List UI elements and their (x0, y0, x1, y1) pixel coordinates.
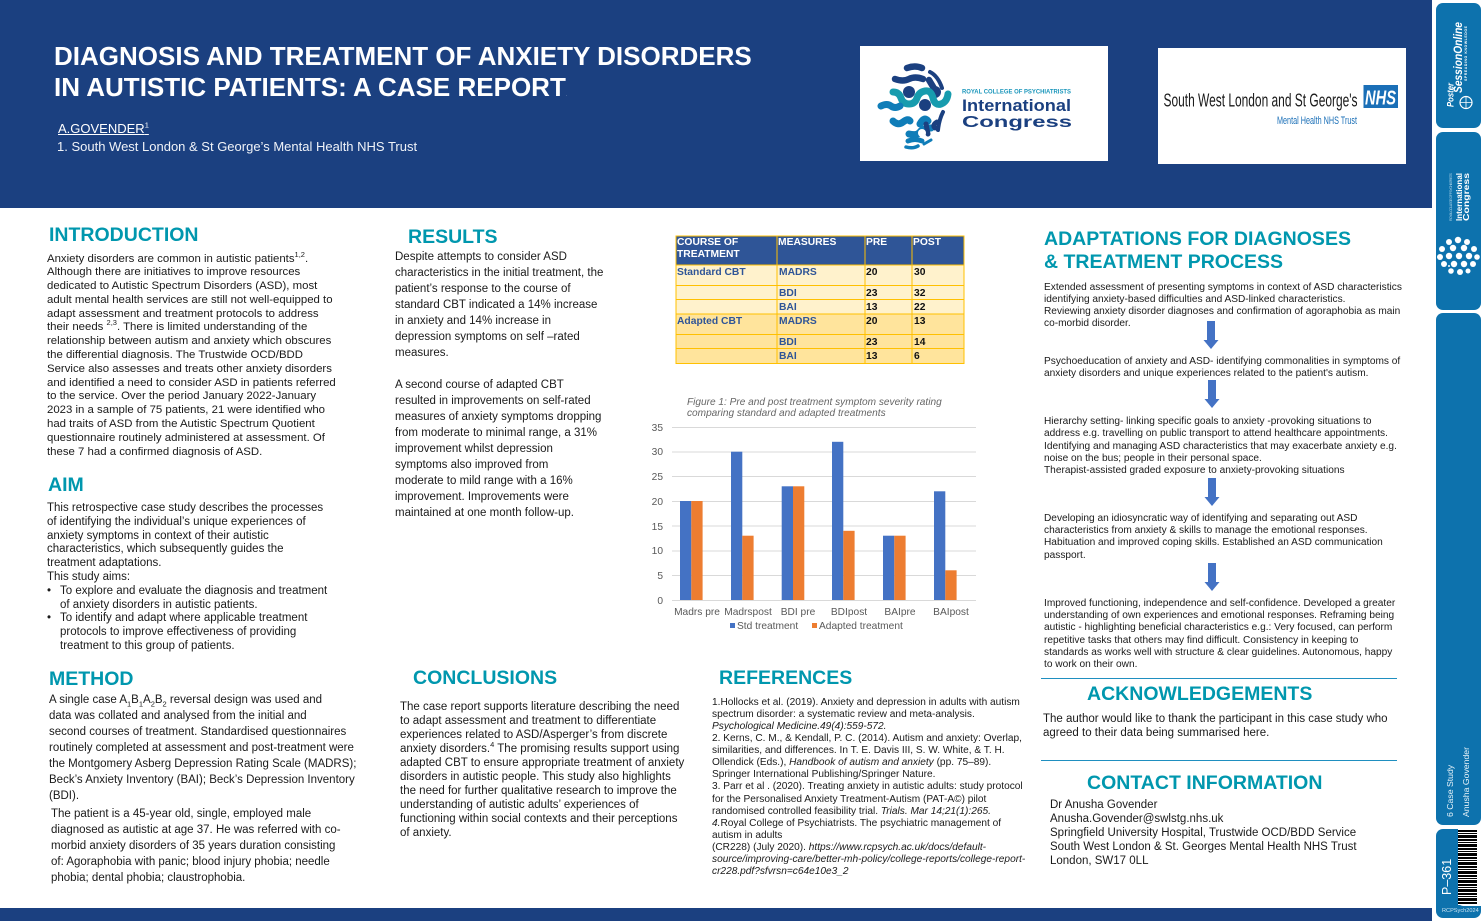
text: step 4: characteristics from anxiety & skills to manage the emotional responses. (1044, 525, 1368, 536)
text: aim: This study aims: (47, 571, 130, 583)
bar chart: 25 (652, 472, 663, 483)
table: pre and post scores: MEASURES (778, 237, 836, 248)
tab: case study (1436, 313, 1481, 825)
table: pre and post scores (676, 236, 964, 364)
text: introduction: the differential diagnosis. The Trustwide OCD/BDD (47, 349, 303, 361)
text: introduction: questionnaire routinely administered at assessment. Of (47, 432, 325, 444)
table: pre and post scores: PRE (866, 237, 887, 248)
table: pre and post scores: 6 (914, 351, 920, 362)
text: step 1: Reviewing anxiety disorder diagnoses and confirmation of agoraphobia as main (1044, 306, 1400, 317)
tab: Poster Session Online (1436, 3, 1481, 128)
text: aim: protocols to improve effectiveness of providing (60, 626, 296, 638)
bar chart: BDIpost (831, 607, 867, 618)
title: IN AUTISTIC PATIENTS: A CASE REPORT. (54, 72, 567, 102)
logo: NHS trust: NHS (1365, 88, 1396, 110)
tab: International Congress: ROYAL COLLEGE OF PSYCHIATRISTS (1449, 172, 1453, 221)
text: acknowledgements (1043, 713, 1388, 739)
text: results (395, 251, 603, 519)
tab: poster number and barcode (1436, 829, 1481, 918)
text: introduction: had traits of ASD from the Autistic Spectrum Quotient (47, 418, 315, 430)
arrow: step 1 to 2 (1204, 321, 1218, 349)
text: conclusions: disorders in autistic people. This study also highlights (400, 771, 671, 783)
text: introduction: these 7 had a confirmed diagnosis of ASD. (47, 446, 262, 458)
text: results: improvement. Improvements were (395, 491, 569, 503)
text: step 4: Developing an idiosyncratic way of identifying and separating out ASD (1044, 513, 1358, 524)
text: aim: characteristics, which subsequently guides the (47, 543, 284, 555)
author: A.GOVENDER1 (58, 121, 149, 136)
text: results: patient’s response to the course of (395, 283, 571, 295)
text: results: characteristics in the initial treatment, the (395, 267, 603, 279)
text: step 4: passport. (1044, 550, 1086, 561)
text: patient description: of: Agoraphobia with panic; blood injury phobia; needle (51, 856, 330, 868)
text: conclusions: adapted CBT to ensure appropriate treatment of anxiety (400, 757, 684, 769)
panel: introduction (47, 224, 336, 458)
text: step 5: Improved functioning, independence and self-confidence. Developed a greater (1044, 598, 1395, 609)
text: patient description: The patient is a 45-year old, single, employed male (51, 808, 311, 820)
panel: acknowledgements (1043, 682, 1388, 739)
logo: RCPsych International Congress (860, 46, 1108, 161)
text: method design: A single case A1B1A2B2 reversal design was used and (49, 694, 322, 708)
text: references: 4.Royal College of Psychiatrists. The psychiatric management of (712, 818, 1001, 829)
heading: acknowledgements: ACKNOWLEDGEMENTS (1087, 682, 1312, 704)
bar chart: 0 (657, 596, 663, 607)
text: results: Despite attempts to consider ASD (395, 251, 567, 263)
text: conclusions: of anxiety. (400, 827, 452, 839)
text: step 1: Extended assessment of presenting symptoms in context of ASD characteristics (1044, 282, 1402, 293)
poster number: P‒361 (1440, 859, 1454, 895)
table: pre and post scores: 13 (866, 351, 878, 362)
text: introduction: 2023 in a sample of 75 patients, 21 were identified who (47, 404, 325, 416)
tab: International Congress (1436, 132, 1481, 310)
text: step 3 (1044, 416, 1397, 476)
text: references: source/improving-care/better-mh-policy/college-reports/college-report- (712, 854, 1025, 865)
text: results: resulted in improvements on self-rated (395, 395, 591, 407)
text: aim: treatment to this group of patients. (60, 640, 235, 652)
text: aim: • (47, 585, 51, 597)
text: step 2: anxiety disorders and unique experiences related to the patient's autism. (1044, 368, 1368, 379)
tab: case study: 6 Case Study (1445, 765, 1455, 817)
text: method design: second courses of treatment. Standardised questionnaires (49, 726, 346, 738)
text: conclusions: experiences related to ASD/Asperger’s from discrete (400, 729, 667, 741)
panel: side rail (1436, 3, 1481, 918)
figure caption: comparing standard and adapted treatments (687, 408, 886, 419)
text: results: depression symptoms on self –rated (395, 331, 580, 343)
text: references: randomised controlled feasibility trial. Trials. Mar 14;21(1):265. (712, 806, 991, 817)
arrow: step 4 to 5 (1204, 563, 1220, 591)
panel: adaptations (1044, 228, 1402, 670)
heading: results: RESULTS (408, 226, 498, 248)
text: patient description: morbid anxiety disorders of 35 years duration consisting (51, 840, 335, 852)
panel: contact information (1050, 772, 1357, 867)
tab: Poster Session Online: Poster (1446, 82, 1456, 107)
bar chart: BAIpost (933, 607, 969, 618)
text: introduction: dedicated to Autistic Spectrum Disorders (ASD), most (47, 280, 317, 292)
table: pre and post scores: TREATMENT (677, 249, 740, 260)
text: references: spectrum disorder: a systematic review and meta-analysis. (712, 709, 975, 720)
bar chart: 20 (652, 497, 663, 508)
table: pre and post scores: BAI (779, 302, 797, 313)
text: references: Ollendick (Eds.), Handbook of autism and anxiety (pp. 75–89). (712, 757, 991, 768)
text: introduction: Although there are initiatives to improve resources (47, 266, 300, 278)
table: pre and post scores: BDI (779, 337, 797, 348)
text: references: cr228.pdf?sfvrsn=c64e10e3_2 (712, 866, 849, 877)
text: step 3: Therapist-assisted graded exposure to anxiety-provoking situations (1044, 465, 1345, 476)
text: aim: To explore and evaluate the diagnosis and treatment (60, 585, 327, 597)
text: step 2 (1044, 356, 1400, 379)
tab: Poster Session Online: SessionOnline (1451, 22, 1465, 93)
text: aim: treatment adaptations. (47, 557, 161, 569)
table: pre and post scores: Standard CBT (677, 267, 746, 278)
text: method design: Beck’s Anxiety Inventory (BAI); Beck’s Depression Inventory (49, 774, 355, 786)
text: introduction: Service also assesses and treats other anxiety disorders (47, 363, 332, 375)
text: introduction (47, 250, 336, 458)
heading: adaptations: & TREATMENT PROCESS (1044, 250, 1283, 272)
text: conclusions: anxiety disorders.4 The promising results support using (400, 740, 679, 755)
table: pre and post scores: 20 (866, 316, 878, 327)
table: pre and post scores: MADRS (779, 267, 817, 278)
table: pre and post scores: 13 (866, 302, 878, 313)
text: conclusions: to adapt assessment and treatment to differentiate (400, 715, 656, 727)
text: step 3: Hierarchy setting- linking specific goals to anxiety -provoking situations to (1044, 416, 1372, 427)
text: step 3: noise on the bus; people in their personal space. (1044, 453, 1262, 464)
text: references (712, 697, 1025, 877)
heading: adaptations (1044, 228, 1351, 272)
text: introduction: adult mental health services are still not well-equipped to (47, 294, 333, 306)
conference tag: RCPSych2024 (1442, 908, 1479, 914)
affiliation: 1. South West London & St George’s Mental Health NHS Trust (57, 139, 417, 154)
text: results: from moderate to minimal range, a 31% (395, 427, 597, 439)
footer band (0, 908, 1432, 921)
tab: case study: Anusha Govender (1461, 747, 1471, 817)
text: method design: data was collated and analysed from the initial and (49, 710, 307, 722)
text: conclusions: the need for further qualitative research to improve the (400, 785, 677, 797)
tab: Poster Session Online: SPREADING KNOWLEDGE (1464, 25, 1468, 81)
table: pre and post scores: 14 (914, 337, 926, 348)
bar chart: Adapted treatment (819, 621, 903, 632)
panel: method (49, 668, 356, 884)
text: results: measures of anxiety symptoms dropping (395, 411, 601, 423)
text: step 4: Habituation and improved coping skills. Established an ASD communication (1044, 537, 1383, 548)
bar chart: 15 (652, 522, 663, 533)
text: conclusions: The case report supports literature describing the need (400, 701, 679, 713)
text: step 1 (1044, 282, 1402, 329)
panel: aim (47, 474, 328, 652)
figure caption (687, 397, 942, 419)
text: step 1: co-morbid disorder. (1044, 318, 1131, 329)
bar chart (652, 423, 976, 632)
text: references: (CR228) (July 2020). https://www.rcpsych.ac.uk/docs/default- (712, 842, 986, 853)
arrow: step 2 to 3 (1204, 380, 1220, 408)
text: step 5: autistic - highlighting beneficial characteristics e.g.: Very focused, can perform (1044, 622, 1392, 633)
bar chart: 5 (657, 571, 663, 582)
heading: contact information: CONTACT INFORMATION (1087, 772, 1322, 794)
text: step 5: to work on their own. (1044, 659, 1137, 670)
text: introduction: relationship between autism and anxiety which obscures (47, 335, 331, 347)
bar chart: Madrs pre (674, 607, 720, 618)
text: introduction: adapt assessment and treatment protocols to address (47, 308, 319, 320)
text: step 4 (1044, 513, 1383, 561)
text: method design (49, 694, 356, 802)
text: contact details (1050, 799, 1357, 867)
text: aim: of identifying the individual’s unique experiences of (47, 516, 306, 528)
text: results: A second course of adapted CBT (395, 379, 564, 391)
table: pre and post scores: MADRS (779, 316, 817, 327)
text: results: maintained at one month follow-up. (395, 507, 574, 519)
text: references: 1.Hollocks et al. (2019). Anxiety and depression in adults with autism (712, 697, 1020, 708)
text: contact details: London, SW17 0LL (1050, 855, 1148, 867)
header band (0, 0, 1432, 208)
text: references: for the Personalised Anxiety Treatment-Autism (PAT-A©) pilot (712, 794, 986, 804)
text: introduction: Anxiety disorders are common in autistic patients1,2. (47, 250, 308, 264)
tab: International Congress: International (1455, 173, 1464, 221)
text: results: in anxiety and 14% increase in (395, 315, 551, 327)
heading: conclusions: CONCLUSIONS (413, 666, 557, 688)
text: introduction: their needs 2,3. There is limited understanding of the (47, 319, 307, 333)
table: pre and post scores: 22 (914, 302, 926, 313)
heading: introduction: INTRODUCTION (49, 224, 198, 246)
text: results: moderate to mild range with a 16% (395, 475, 573, 487)
text: method design: routinely completed at assessment and post-treatment were (49, 742, 354, 754)
text: step 5: understanding of own experiences and emotional responses. Reframing being (1044, 610, 1394, 621)
text: step 3: address e.g. travelling on public transport to attend healthcare appointments. (1044, 428, 1388, 439)
text: step 5 (1044, 598, 1396, 670)
text: references: Springer International Publishing/Springer Nature. (712, 769, 935, 780)
logo: NHS trust: Mental Health NHS Trust (1277, 115, 1357, 127)
text: results: symptoms also improved from (395, 459, 548, 471)
text: aim: • (47, 612, 51, 624)
title: DIAGNOSIS AND TREATMENT OF ANXIETY DISORDERS (54, 41, 752, 71)
heading: adaptations: ADAPTATIONS FOR DIAGNOSES (1044, 228, 1351, 250)
text: introduction: to the service. Over the period January 2022-January (47, 390, 316, 402)
heading: aim: AIM (48, 474, 84, 496)
heading: method: METHOD (49, 668, 134, 690)
title (54, 41, 752, 102)
table: pre and post scores: BDI (779, 288, 797, 299)
text: contact details: Anusha.Govender@swlstg.nhs.uk (1050, 813, 1223, 825)
logo: RCPsych International Congress: ROYAL COLLEGE OF PSYCHIATRISTS (962, 88, 1072, 96)
barcode (1458, 829, 1481, 906)
text: step 5: standards as works well with structure & clear guidelines. Autonomous, happy (1044, 647, 1392, 658)
table: pre and post scores: 32 (914, 288, 926, 299)
text: acknowledgements: The author would like to thank the participant in this case study who (1043, 713, 1388, 725)
text: references: 2. Kerns, C. M., & Kendall, P. C. (2014). Autism and anxiety: Overlap, (712, 733, 1022, 744)
table: pre and post scores: 13 (914, 316, 926, 327)
text: step 5: repetitive tasks that others may find difficult. Consistency in keeping to (1044, 635, 1358, 646)
text: references: similarities, and differences. In T. E. Davis III, S. W. White, & T. H. (712, 745, 1005, 756)
bar chart: Madrspost (724, 607, 772, 618)
text: results: improvement whilst depression (395, 443, 553, 455)
text: aim: of anxiety disorders in autistic patients. (60, 599, 258, 611)
logo: RCPsych International Congress: International (962, 96, 1071, 115)
panel: references (712, 666, 1025, 877)
text: step 1: identifying anxiety-based difficulties and ASD-linked characteristics. (1044, 294, 1345, 305)
logo: RCPsych International Congress: Congress (962, 114, 1072, 131)
text: method design: (BDI). (49, 790, 79, 802)
table: pre and post scores: COURSE OF (677, 237, 738, 248)
table: pre and post scores: BAI (779, 351, 797, 362)
text: conclusions: understanding of autistic adults’ experiences of (400, 799, 639, 811)
text: acknowledgements: agreed to their data being summarised here. (1043, 727, 1269, 739)
table: pre and post scores: 20 (866, 267, 878, 278)
bar chart: 35 (652, 423, 663, 434)
bar chart: BDI pre (781, 607, 816, 618)
text: introduction: and identified a need to consider ASD in patients referred (47, 377, 336, 389)
text: step 3: Identifying and managing ASD characteristics that may exacerbate anxiety e.g. (1044, 440, 1397, 452)
table: pre and post scores: POST (913, 237, 942, 248)
text: method design: the Montgomery Asberg Depression Rating Scale (MADRS); (49, 758, 356, 770)
text: patient description: diagnosed as autistic at age 37. He was referred with co- (51, 824, 341, 836)
text: results: standard CBT indicated a 14% increase (395, 299, 597, 311)
text: contact details: Springfield University Hospital, Trustwide OCD/BDD Service (1050, 827, 1356, 839)
table: pre and post scores: Adapted CBT (677, 316, 743, 327)
text: conclusions: functioning within social contexts and their perceptions (400, 813, 677, 825)
text: aim: This retrospective case study describes the processes (47, 502, 323, 514)
bar chart: Std treatment (737, 621, 798, 632)
text: conclusions (400, 701, 684, 839)
panel: conclusions (400, 666, 684, 839)
text: references: autism in adults (712, 830, 782, 841)
text: step 2: Psychoeducation of anxiety and ASD- identifying commonalities in symptoms of (1044, 356, 1400, 367)
figure caption: Figure 1: Pre and post treatment symptom severity rating (687, 397, 942, 408)
arrow: step 3 to 4 (1204, 478, 1220, 506)
bar chart: 30 (652, 447, 663, 458)
table: pre and post scores: 23 (866, 288, 878, 299)
bar chart: BAIpre (884, 607, 916, 618)
tab: International Congress: Congress (1462, 172, 1471, 221)
heading: references: REFERENCES (719, 666, 852, 688)
table: pre and post scores: 23 (866, 337, 878, 348)
text: references: Psychological Medicine.49(4):559-572. (712, 721, 886, 732)
bar chart: 10 (652, 546, 663, 557)
table: pre and post scores: 30 (914, 267, 926, 278)
logo: NHS trust (1158, 48, 1406, 164)
text: aim (47, 502, 328, 652)
text: contact details: Dr Anusha Govender (1050, 799, 1157, 811)
text: aim: anxiety symptoms in context of their autistic (47, 530, 269, 542)
text: patient description: phobia; dental phobia; claustrophobia. (51, 872, 245, 884)
text: patient description (51, 808, 341, 884)
text: references: 3. Parr et al . (2020). Treating anxiety in autistic adults: study protocol (712, 781, 1023, 792)
text: contact details: South West London & St. Georges Mental Health NHS Trust (1050, 841, 1357, 853)
text: results: measures. (395, 347, 449, 359)
text: aim: To identify and adapt where applicable treatment (60, 612, 307, 624)
panel: results (395, 226, 603, 519)
